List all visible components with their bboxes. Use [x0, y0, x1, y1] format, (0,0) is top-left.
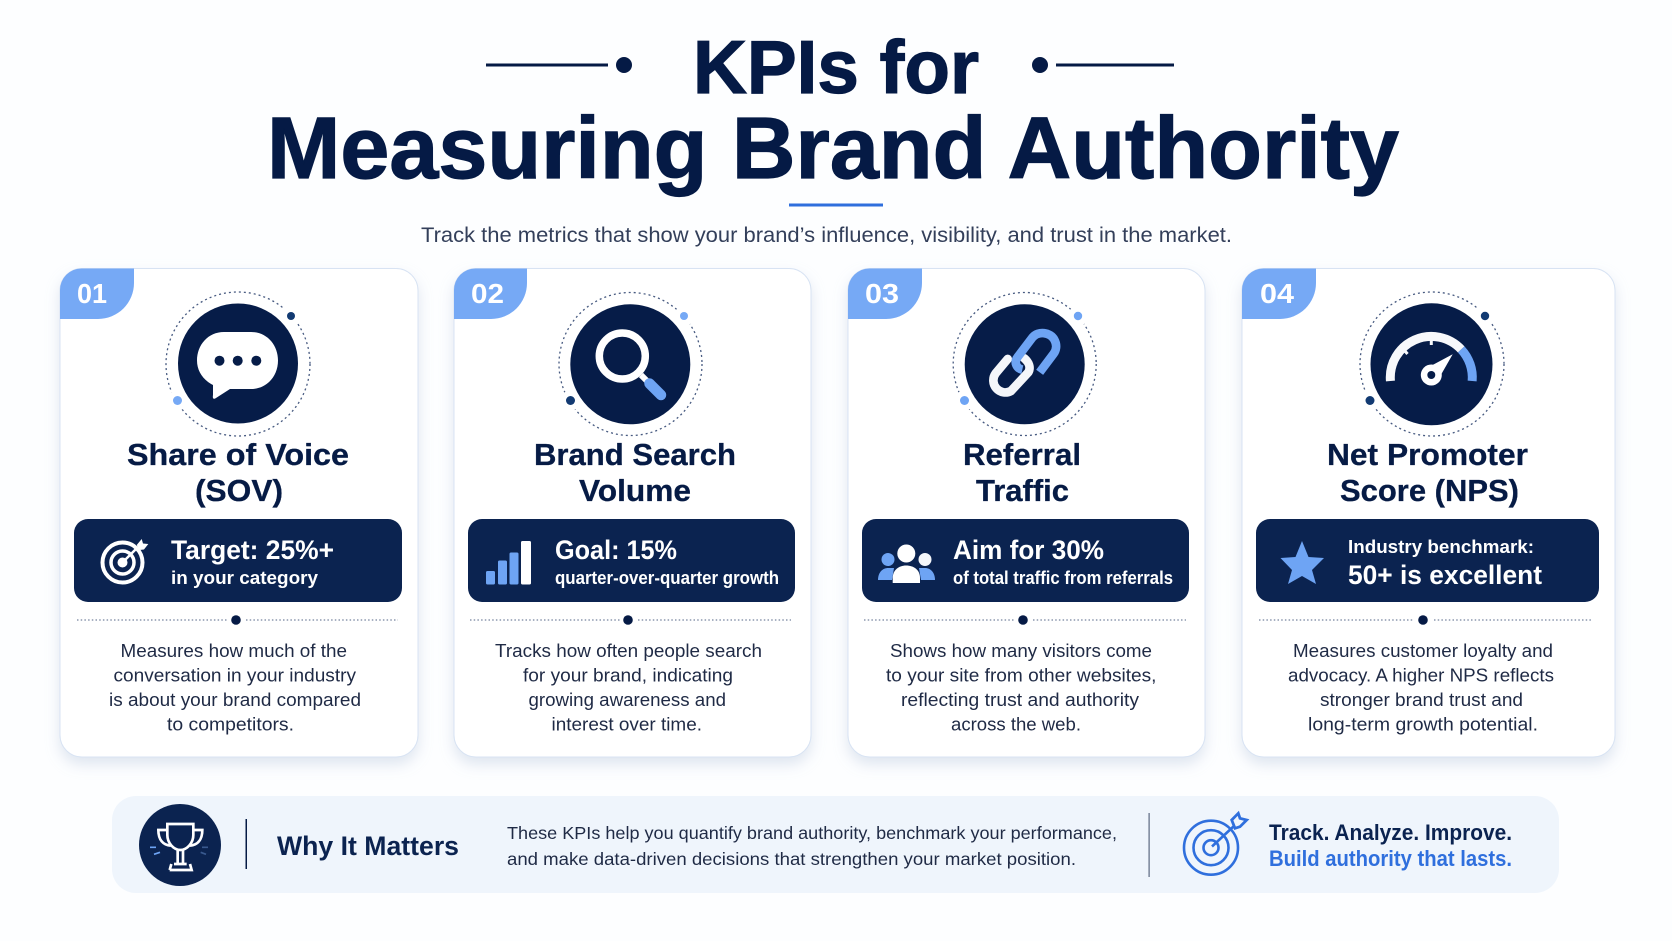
badge 01	[60, 268, 134, 319]
description: Measures how much of the	[120, 640, 347, 661]
benchmark pill: 50+ is excellent	[1348, 560, 1542, 590]
card title	[534, 437, 736, 508]
badge 02	[454, 268, 527, 319]
card title: (SOV)	[195, 473, 283, 508]
goal pill	[468, 519, 795, 602]
description: growing awareness and	[528, 689, 726, 710]
badge 02: 02	[471, 278, 504, 309]
icon: gauge	[1360, 292, 1504, 436]
panel: share of voice	[60, 268, 418, 757]
vertical rule	[1148, 813, 1150, 877]
icon: trophy	[139, 804, 221, 886]
card title	[127, 437, 349, 508]
card title: Net Promoter	[1327, 437, 1528, 472]
card title: Brand Search	[534, 437, 736, 472]
description: interest over time.	[552, 714, 702, 734]
card title	[1327, 437, 1528, 508]
target pill: in your category	[171, 567, 319, 588]
icon: chain link	[953, 292, 1096, 436]
description: for your brand, indicating	[523, 664, 733, 686]
heading: Why It Matters	[277, 831, 459, 861]
divider	[470, 615, 791, 625]
panel: why it matters	[112, 796, 1559, 893]
card title: Share of Voice	[127, 437, 349, 472]
title: KPIs for	[693, 25, 979, 109]
icon: speech bubble	[166, 292, 310, 436]
explanation text: and make data-driven decisions that strengthen your market position.	[507, 849, 1076, 869]
call to action	[1269, 820, 1512, 871]
icon: people	[878, 544, 935, 583]
icon: bars	[486, 541, 531, 584]
call to action: Build authority that lasts.	[1269, 846, 1512, 871]
description	[1288, 640, 1554, 734]
goal pill: Goal: 15%	[555, 535, 677, 565]
target pill: Target: 25%+	[171, 535, 334, 565]
icon: star	[1280, 541, 1324, 584]
subtitle: Track the metrics that show your brand’s influence, visibility, and trust in the market.	[421, 223, 1232, 247]
aim pill	[862, 519, 1189, 602]
icon: magnifier	[559, 292, 702, 436]
goal pill: quarter-over-quarter growth	[555, 567, 779, 588]
description: advocacy. A higher NPS reflects	[1288, 664, 1554, 686]
divider	[1259, 615, 1592, 625]
aim pill: Aim for 30%	[953, 535, 1104, 565]
icon: blue target	[1184, 813, 1247, 875]
description: long-term growth potential.	[1308, 714, 1538, 734]
explanation text	[507, 823, 1117, 869]
badge 01: 01	[77, 278, 107, 309]
badge 04: 04	[1260, 278, 1294, 309]
card title	[963, 437, 1081, 508]
description	[495, 640, 762, 734]
badge 04	[1242, 268, 1316, 319]
description: to competitors.	[167, 714, 294, 734]
description: across the web.	[951, 714, 1081, 734]
card title: Score (NPS)	[1340, 473, 1519, 508]
description	[886, 640, 1156, 734]
call to action: Track. Analyze. Improve.	[1269, 820, 1512, 845]
description	[109, 640, 361, 734]
description: to your site from other websites,	[886, 664, 1156, 686]
title underline	[789, 204, 883, 206]
badge 03	[848, 268, 922, 319]
title	[267, 25, 1399, 197]
title ornament: left	[486, 57, 632, 73]
description: reflecting trust and authority	[901, 689, 1140, 710]
description: conversation in your industry	[114, 664, 357, 686]
benchmark pill	[1256, 519, 1599, 602]
panel: net promoter score	[1242, 268, 1615, 757]
icon: target	[102, 539, 148, 582]
vertical rule	[246, 819, 247, 869]
title ornament: right	[1032, 57, 1174, 73]
card title: Volume	[579, 473, 691, 508]
panel: brand search volume	[454, 268, 811, 757]
title: Measuring Brand Authority	[267, 100, 1399, 197]
explanation text: These KPIs help you quantify brand authority, benchmark your performance,	[507, 823, 1117, 843]
description: Measures customer loyalty and	[1293, 640, 1553, 661]
badge 03: 03	[865, 278, 899, 309]
description: is about your brand compared	[109, 689, 361, 710]
divider	[77, 615, 398, 625]
description: stronger brand trust and	[1320, 689, 1523, 710]
aim pill: of total traffic from referrals	[953, 567, 1173, 588]
benchmark pill: Industry benchmark:	[1348, 536, 1534, 557]
divider	[864, 615, 1186, 625]
card title: Traffic	[976, 473, 1069, 508]
description: Tracks how often people search	[495, 640, 762, 661]
target pill	[74, 519, 402, 602]
description: Shows how many visitors come	[890, 640, 1152, 661]
card title: Referral	[963, 437, 1081, 472]
panel: referral traffic	[848, 268, 1205, 757]
